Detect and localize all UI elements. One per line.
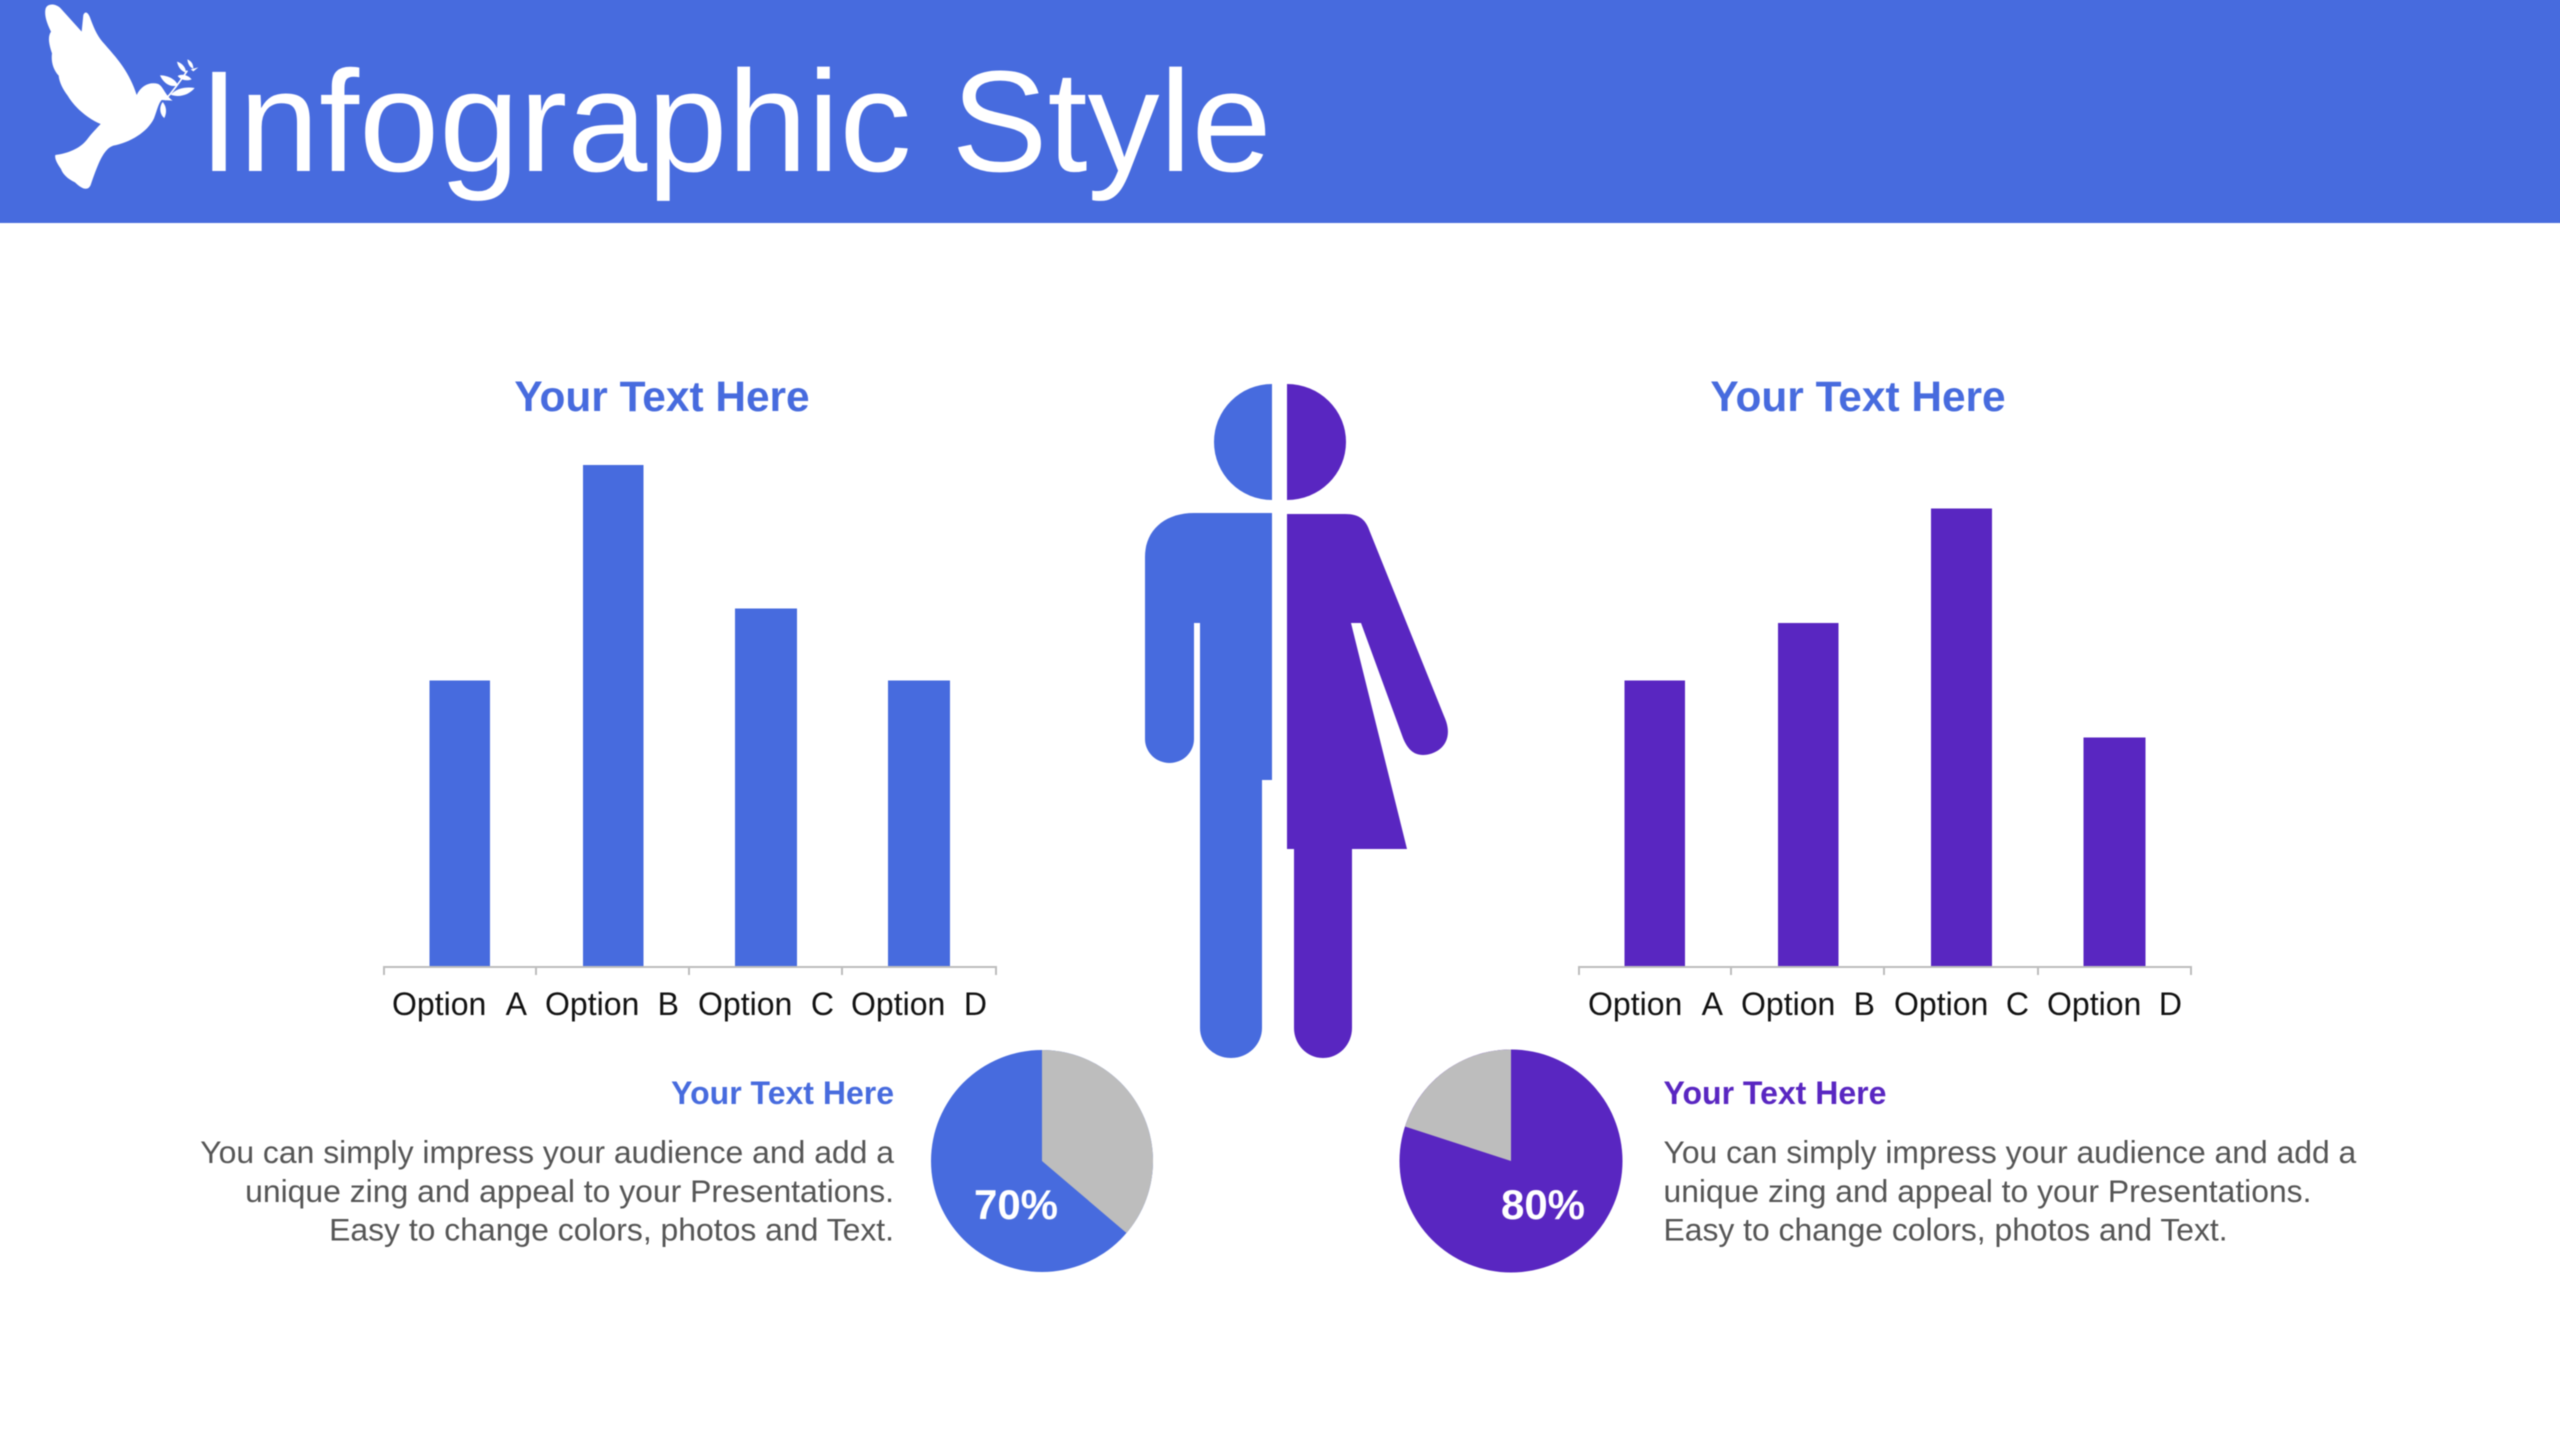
right chart heading: Your Text Here [1710,373,2006,420]
left body text [200,1134,894,1248]
left body text: Easy to change colors, photos and Text. [329,1212,894,1248]
left body text: unique zing and appeal to your Presentations. [245,1173,894,1209]
right body text [1664,1134,2357,1248]
female half [1287,384,1448,1058]
right body text: Easy to change colors, photos and Text. [1664,1212,2228,1248]
bar chart: right: Option [1894,986,1988,1022]
bar chart: right: A [1702,986,1724,1022]
pie chart: 80% [1400,1050,1622,1272]
left chart heading: Your Text Here [514,373,810,420]
pie chart: 80%: 80% [1501,1181,1585,1228]
bar chart: left: C [811,986,834,1022]
bar chart: left: D [964,986,987,1022]
pie chart: 70% [931,1050,1153,1272]
pie chart: 70%: 70% [974,1181,1058,1228]
bar chart: right: D [2159,986,2182,1022]
icon: half man half woman figure [1145,384,1448,1058]
bar chart: right: C [2006,986,2029,1022]
title: Infographic Style [199,41,1272,202]
bar chart: right: Option [1588,986,1682,1022]
bar chart: left: A [506,986,528,1022]
icon: dove with olive branch [45,4,198,189]
header banner [0,0,2560,223]
bar chart: right [1579,508,2191,1022]
right body text: unique zing and appeal to your Presentations. [1664,1173,2311,1209]
bar chart: left: B [658,986,679,1022]
bar chart: right: Option [1741,986,1835,1022]
text block: right [1664,1075,2357,1248]
left subheading: Your Text Here [671,1075,894,1111]
bar chart: left [384,465,996,1022]
bar chart: left: Option [698,986,792,1022]
male half [1145,384,1272,1058]
bar chart: left: Option [851,986,945,1022]
right body text: You can simply impress your audience and add a [1664,1134,2357,1170]
bar chart: left: Option [392,986,486,1022]
bar chart: right: Option [2047,986,2141,1022]
bar chart: left: Option [545,986,639,1022]
text block: left [200,1075,894,1248]
right subheading: Your Text Here [1664,1075,1886,1111]
bar chart: right: B [1854,986,1875,1022]
left body text: You can simply impress your audience and add a [200,1134,894,1170]
